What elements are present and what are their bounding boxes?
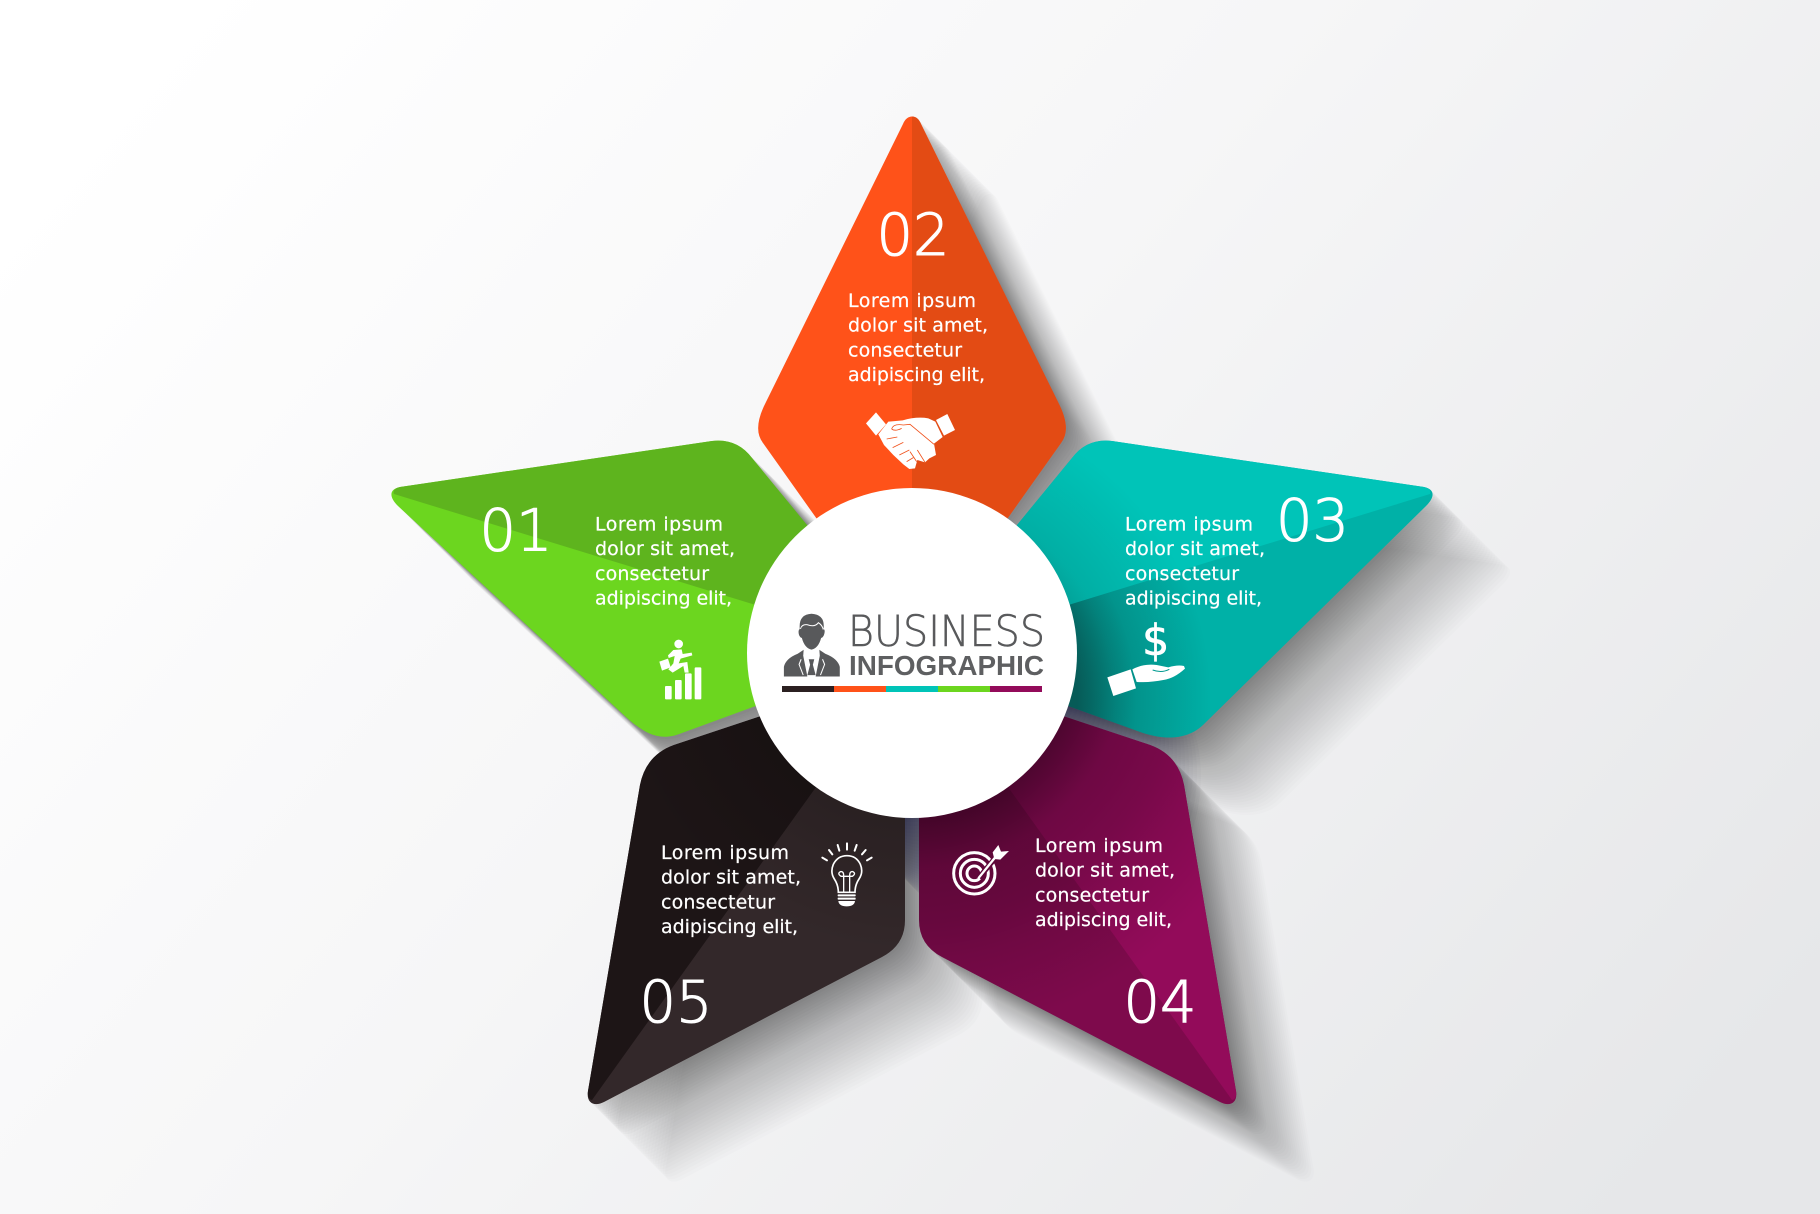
text block 05 [661, 842, 801, 938]
text block 04: Lorem ipsum [1035, 835, 1163, 857]
text block 01: adipiscing elit, [595, 588, 732, 610]
text block 05: adipiscing elit, [661, 916, 798, 938]
title: INFOGRAPHIC: INFOGRAPHIC [849, 650, 1044, 681]
text block 05: dolor sit amet, [661, 867, 801, 889]
text block 02: consectetur [848, 339, 962, 361]
petal shape: black [588, 653, 912, 1104]
text block 03: dolor sit amet, [1125, 538, 1265, 560]
panel: 03 teal [912, 441, 1433, 738]
number 01: 01 [480, 496, 552, 564]
text block 04 [1035, 835, 1175, 931]
text block 01: consectetur [595, 563, 709, 585]
text block 03: Lorem ipsum [1125, 514, 1253, 536]
centre circle with logo [747, 488, 1077, 818]
petal shape: teal [912, 441, 1433, 738]
icon: runner on rising bars [659, 640, 701, 699]
text block 02: dolor sit amet, [848, 315, 988, 337]
text block 01: dolor sit amet, [595, 538, 735, 560]
petal shape: magenta [912, 653, 1236, 1104]
icon: hand holding dollar [1107, 616, 1185, 696]
petal shape: orange [758, 116, 1066, 653]
number 03: 03 [1276, 486, 1349, 554]
petal shape: green [391, 441, 912, 737]
icon: light bulb [822, 843, 872, 906]
text block 01: Lorem ipsum [595, 514, 723, 536]
long shadow of the centre circle [747, 488, 1201, 942]
panel: 05 black [588, 653, 912, 1104]
text block 04: dolor sit amet, [1035, 860, 1175, 882]
icon: handshake [866, 412, 955, 469]
text block 03: adipiscing elit, [1125, 588, 1262, 610]
panel: 04 magenta [912, 653, 1236, 1104]
text block 03 [1125, 514, 1265, 610]
text block 02 [848, 290, 988, 386]
panel: 02 orange [758, 116, 1066, 653]
text block 02: Lorem ipsum [848, 290, 976, 312]
text block 02: adipiscing elit, [848, 364, 985, 386]
colour bar [782, 686, 1042, 692]
icon: businessman [784, 614, 840, 676]
icon: target with arrow [954, 845, 1009, 894]
panel: 01 green [391, 441, 912, 737]
title: BUSINESS: BUSINESS [848, 607, 1045, 657]
number 05: 05 [640, 968, 712, 1036]
icon: hand holding dollar: $ [1142, 616, 1169, 666]
text block 05: consectetur [661, 891, 775, 913]
long shadows of the petals [391, 116, 1510, 1182]
text block 03: consectetur [1125, 563, 1239, 585]
text block 04: adipiscing elit, [1035, 909, 1172, 931]
text block 04: consectetur [1035, 884, 1149, 906]
number 04: 04 [1124, 968, 1196, 1036]
text block 05: Lorem ipsum [661, 842, 789, 864]
number 02: 02 [876, 201, 950, 269]
text block 01 [595, 514, 735, 610]
